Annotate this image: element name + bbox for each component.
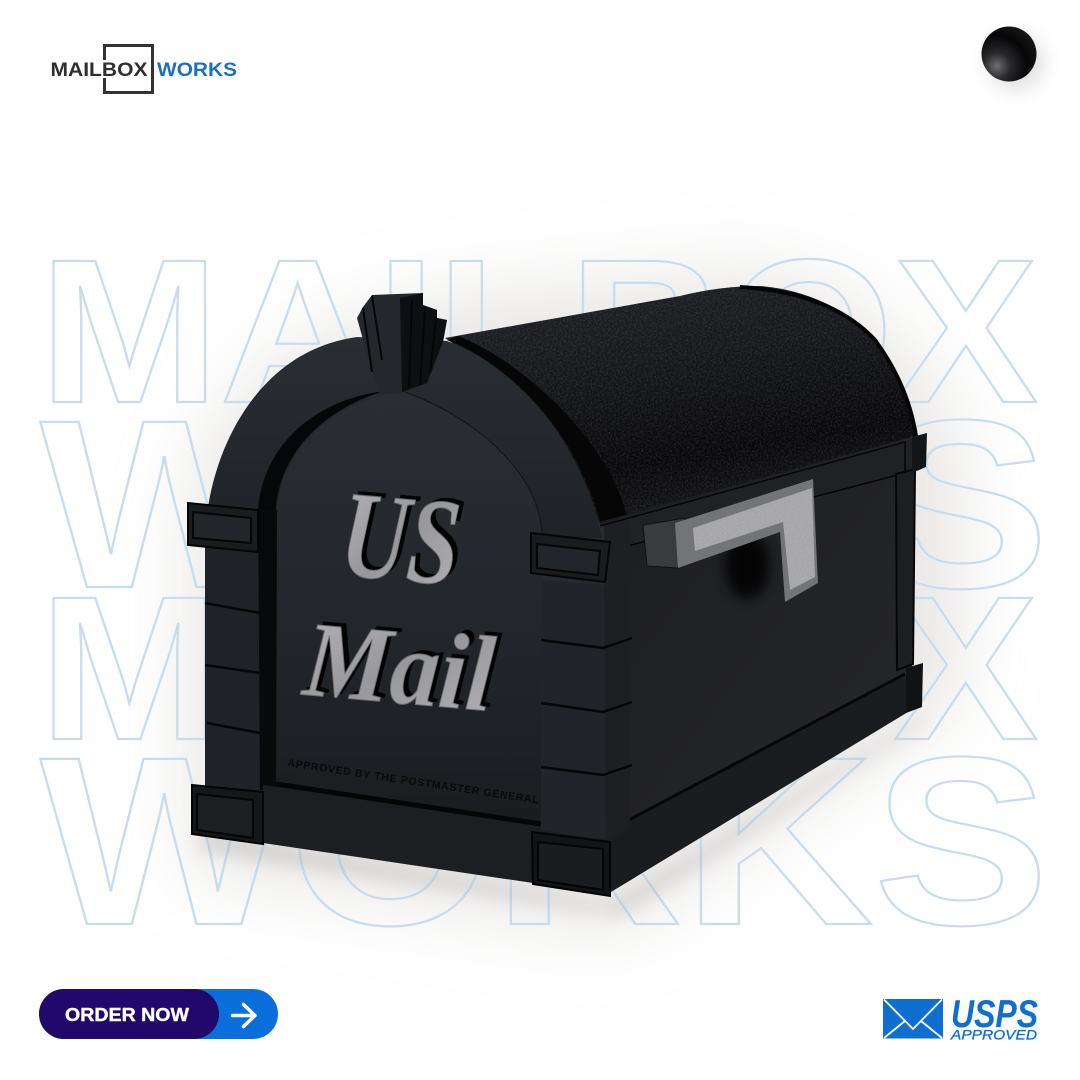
flag textured inset [693, 488, 815, 590]
right top block [531, 533, 610, 582]
USPS wordmark: USPS [951, 993, 1038, 1036]
barrel roof [445, 286, 916, 528]
right pilaster [541, 580, 606, 840]
inner arch thin line [405, 392, 542, 535]
side upper rail [600, 442, 905, 548]
left corner block [192, 785, 263, 844]
flag bracket [643, 518, 685, 568]
mailbox product illustration [188, 286, 945, 915]
background outlined wordmark [39, 217, 1049, 975]
icon: envelope [883, 999, 943, 1038]
flag shadow [725, 531, 769, 599]
outline word: MAILBOX top: MAILBOX [39, 217, 1038, 446]
APPROVED wordmark: APPROVED [950, 1028, 1037, 1042]
left brick joints [205, 603, 260, 733]
embossed lettering: Mail: Mail [303, 596, 504, 731]
order now button [39, 989, 278, 1039]
outline word: MAILBOX bottom: MAILBOX [39, 554, 1038, 783]
side rear post [896, 469, 915, 670]
logo word WORKS: WORKS [157, 59, 237, 81]
side panel [600, 436, 916, 850]
barrel front lip [447, 336, 628, 530]
USPS approved badge [883, 993, 1038, 1042]
crest ornament [357, 293, 447, 394]
logo square frame [104, 46, 152, 92]
barrel rear rim [740, 287, 916, 436]
left top block [188, 503, 258, 552]
soft glow behind mailbox [190, 270, 960, 930]
cast shadow [200, 450, 945, 915]
embossed small print: APPROVED BY THE POSTMASTER GENERAL [287, 757, 540, 807]
button dark pill [39, 989, 219, 1039]
left pilaster [205, 545, 260, 790]
rear cap top [912, 433, 927, 473]
inner door panel [276, 392, 542, 822]
decorative black sphere [982, 26, 1044, 90]
flag [675, 479, 818, 602]
front panel base shape [205, 505, 606, 870]
outline word: WORKS bottom: WORKS [40, 707, 1049, 975]
outline word: WORKS top: WORKS [40, 370, 1049, 638]
logo word MAILBOX: MAILBOX [50, 59, 148, 81]
button blue track [39, 989, 278, 1039]
front base [263, 785, 541, 883]
embossed lettering: US: US [341, 462, 471, 608]
embossed lettering: US: US [336, 465, 465, 612]
front arch [208, 337, 602, 540]
side base rail [606, 675, 908, 895]
right brick joints [541, 638, 632, 775]
embossed lettering: Mail: Mail [298, 600, 499, 735]
icon: arrow [232, 1004, 255, 1026]
logo: Mailbox Works [50, 46, 237, 92]
arch dark inner shadow [258, 391, 385, 510]
button label: ORDER NOW [65, 1005, 189, 1025]
right corner block [532, 832, 610, 896]
rear cap bottom [906, 663, 923, 713]
